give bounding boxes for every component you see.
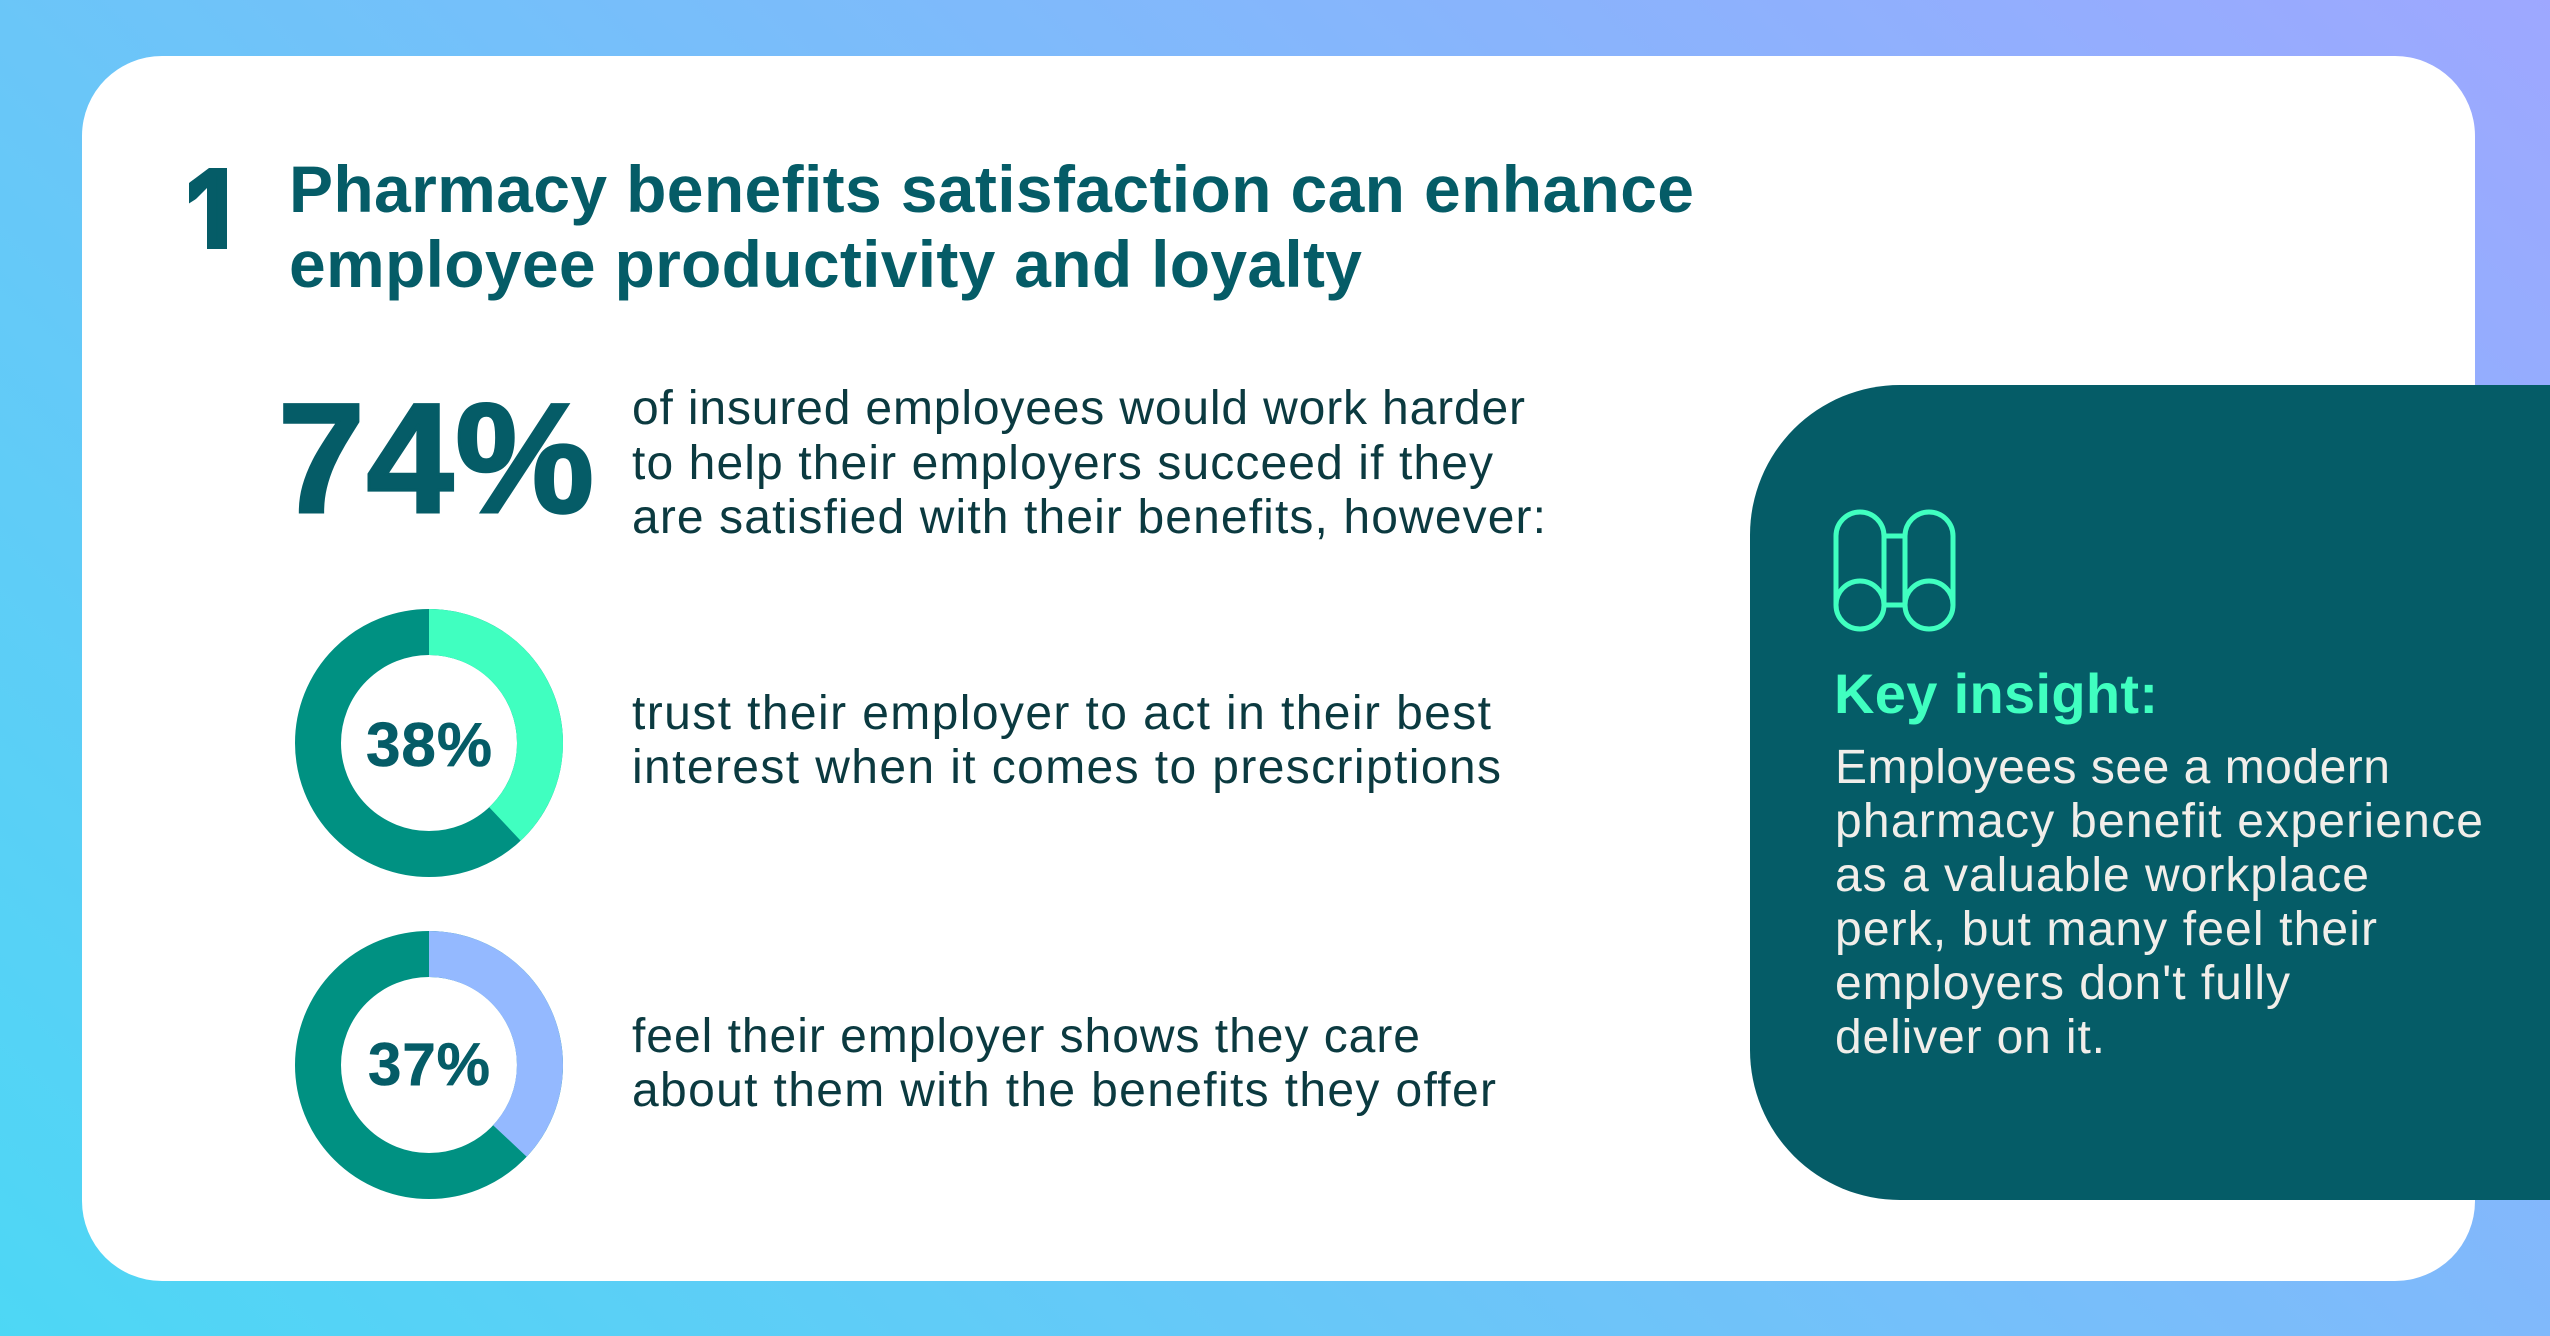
- text block: 37% description: about them with the benefits they offer: [632, 1064, 1496, 1117]
- donut chart: 38%: 38%: [366, 711, 492, 780]
- text block: 38% description: interest when it comes to prescriptions: [632, 741, 1501, 794]
- heading: employee productivity and loyalty: [289, 227, 1362, 301]
- key insight text: deliver on it.: [1835, 1011, 2105, 1064]
- key insight text: Employees see a modern: [1835, 741, 2390, 794]
- panel: key insight: [1750, 385, 2550, 1200]
- key insight text: as a valuable workplace: [1835, 849, 2369, 902]
- heading: Pharmacy benefits satisfaction can enhance: [289, 152, 1694, 226]
- key insight text: [1835, 741, 2483, 1064]
- donut chart: 37%: 37%: [368, 1031, 490, 1098]
- section number: 1: [182, 144, 247, 274]
- key insight text: employers don't fully: [1835, 957, 2290, 1010]
- heading: [289, 152, 1694, 301]
- text block: intro statistic: to help their employers succeed if they: [632, 437, 1493, 490]
- key insight text: perk, but many feel their: [1835, 903, 2377, 956]
- key insight heading: Key insight:: [1834, 662, 2158, 725]
- key insight text: pharmacy benefit experience: [1835, 795, 2483, 848]
- text block: intro statistic: are satisfied with their benefits, however:: [632, 491, 1546, 544]
- text block: 37% description: feel their employer shows they care: [632, 1010, 1420, 1063]
- donut chart: 38%: [318, 609, 563, 854]
- text block: intro statistic: [632, 382, 1546, 544]
- donut chart: 37%: [318, 931, 563, 1176]
- text block: 38% description: trust their employer to act in their best: [632, 687, 1491, 740]
- text block: intro statistic: of insured employees would work harder: [632, 382, 1525, 435]
- text block: 38% description: [632, 687, 1501, 794]
- text block: 37% description: [632, 1010, 1496, 1117]
- big statistic 74%: 74%: [278, 372, 594, 546]
- icon: binoculars: [1836, 512, 1953, 629]
